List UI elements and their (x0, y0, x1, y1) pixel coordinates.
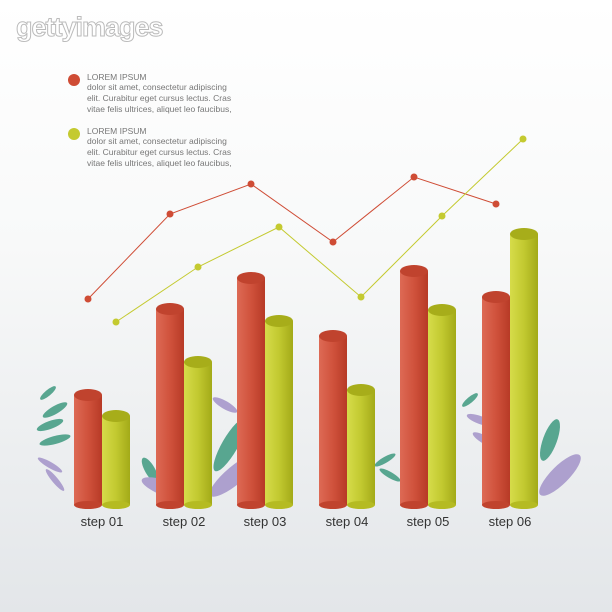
step labels: step 05 (407, 514, 449, 529)
yellow line (112, 136, 526, 326)
bars (74, 228, 538, 509)
legend: vitae felis ultrices, aliquet leo faucibus, (87, 104, 232, 114)
red line (84, 174, 500, 302)
step labels: step 02 (163, 514, 205, 529)
legend: elit. Curabitur eget cursus lectus. Cras (87, 147, 231, 157)
step labels: step 01 (81, 514, 123, 529)
step labels: step 04 (326, 514, 368, 529)
watermark: gettyimages (16, 12, 163, 42)
step labels: step 06 (489, 514, 531, 529)
legend: elit. Curabitur eget cursus lectus. Cras (87, 93, 231, 103)
step labels: step 03 (244, 514, 286, 529)
legend: dolor sit amet, consectetur adipiscing (87, 82, 227, 92)
legend: LOREM IPSUM (87, 126, 147, 136)
legend: LOREM IPSUM (87, 72, 147, 82)
legend: dolor sit amet, consectetur adipiscing (87, 136, 227, 146)
step labels (81, 514, 531, 529)
leaves decoration (35, 377, 586, 508)
legend: vitae felis ultrices, aliquet leo faucibus, (87, 158, 232, 168)
legend (68, 72, 232, 168)
